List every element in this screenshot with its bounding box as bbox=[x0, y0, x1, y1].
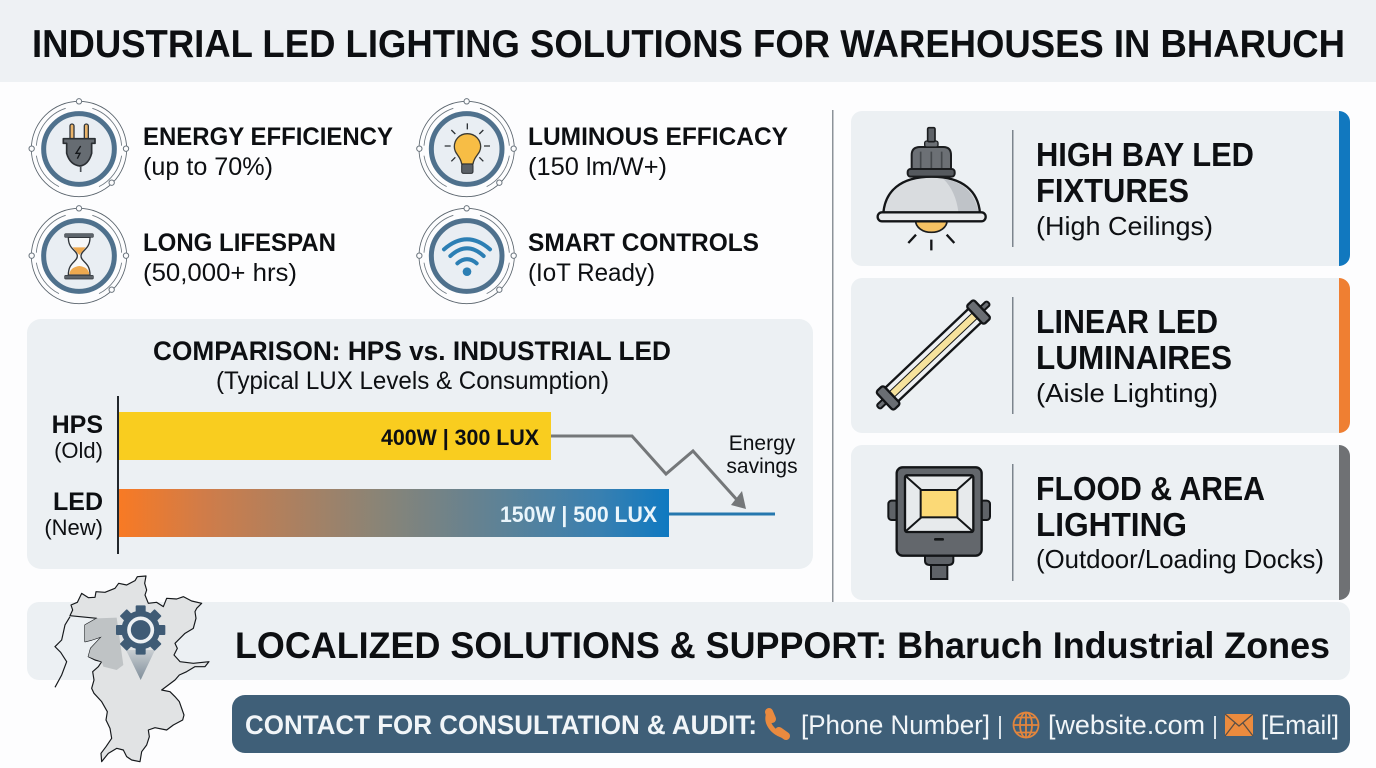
feature: energy efficiency bbox=[29, 99, 393, 197]
icon: envelope bbox=[1225, 714, 1253, 736]
card text: HIGH BAY LED bbox=[1036, 136, 1254, 173]
card text: LUMINAIRES bbox=[1036, 339, 1232, 376]
label: HPS: (Old) bbox=[54, 438, 103, 463]
icon: gear bbox=[116, 605, 165, 655]
card text bbox=[1036, 470, 1324, 574]
card text bbox=[1036, 303, 1232, 408]
localized support banner bbox=[27, 602, 1350, 680]
contact bar: [Phone Number] bbox=[801, 710, 990, 740]
card text: (Outdoor/Loading Docks) bbox=[1036, 544, 1324, 574]
card text: (Aisle Lighting) bbox=[1036, 378, 1218, 408]
feature: energy efficiency: ENERGY EFFICIENCY bbox=[143, 123, 393, 151]
panel: linear bbox=[851, 278, 1350, 433]
divider bbox=[832, 110, 834, 602]
icon: high bay lamp bbox=[878, 128, 986, 250]
contact bar bbox=[232, 695, 1350, 753]
arrow: energy savings bbox=[551, 436, 775, 514]
contact bar: CONTACT FOR CONSULTATION & AUDIT: bbox=[245, 710, 757, 740]
card text: FIXTURES bbox=[1036, 172, 1189, 209]
icon: globe bbox=[1014, 712, 1038, 738]
icon: hourglass bbox=[29, 206, 129, 304]
annotation: energy savings bbox=[726, 432, 798, 478]
card text: (High Ceilings) bbox=[1036, 211, 1213, 241]
feature: luminous efficacy: (150 lm/W+) bbox=[528, 153, 667, 181]
localized support banner: LOCALIZED SOLUTIONS & SUPPORT: Bharuch Industrial Zones bbox=[235, 625, 1330, 666]
annotation: energy savings: Energy bbox=[729, 432, 796, 455]
bar: LED: 150W | 500 LUX bbox=[500, 502, 657, 527]
icon: plug bbox=[29, 99, 129, 197]
card text: LIGHTING bbox=[1036, 506, 1187, 543]
feature: luminous efficacy bbox=[417, 99, 788, 197]
panel: flood bbox=[851, 445, 1350, 600]
icon: flood light bbox=[888, 467, 990, 579]
bar: LED bbox=[119, 489, 669, 537]
panel: high bay bbox=[851, 111, 1350, 266]
feature: energy efficiency: (up to 70%) bbox=[143, 153, 273, 181]
icon: light bulb bbox=[417, 99, 516, 197]
chart subheading: (Typical LUX Levels & Consumption) bbox=[216, 367, 609, 395]
feature: long lifespan: LONG LIFESPAN bbox=[143, 229, 336, 257]
card text bbox=[1036, 136, 1254, 241]
map with gear pin bbox=[55, 576, 209, 762]
card text: LINEAR LED bbox=[1036, 303, 1218, 340]
axis bbox=[117, 396, 119, 554]
label: HPS bbox=[52, 411, 103, 463]
feature: smart controls bbox=[417, 206, 759, 304]
contact bar: | bbox=[997, 712, 1003, 740]
annotation: energy savings: savings bbox=[726, 455, 798, 478]
contact bar: [Email] bbox=[1261, 710, 1339, 740]
icon: wifi bbox=[417, 206, 516, 304]
label: HPS: HPS bbox=[52, 411, 103, 439]
card text: FLOOD & AREA bbox=[1036, 470, 1265, 507]
contact bar: | bbox=[1212, 712, 1218, 740]
feature: long lifespan bbox=[29, 206, 336, 304]
contact bar: [website.com bbox=[1048, 710, 1205, 740]
feature: smart controls: SMART CONTROLS bbox=[528, 229, 759, 257]
bar: HPS: 400W | 300 LUX bbox=[381, 425, 539, 450]
chart heading: COMPARISON: HPS vs. INDUSTRIAL LED bbox=[153, 336, 671, 366]
bar: HPS bbox=[119, 412, 551, 460]
feature: luminous efficacy: LUMINOUS EFFICACY bbox=[528, 123, 788, 151]
icon: linear tube bbox=[869, 293, 997, 416]
feature: long lifespan: (50,000+ hrs) bbox=[143, 259, 297, 287]
label: LED: LED bbox=[53, 488, 103, 516]
header band bbox=[0, 0, 1376, 82]
panel: comparison chart bbox=[27, 319, 813, 569]
label: LED bbox=[44, 488, 103, 540]
icon: phone bbox=[768, 712, 786, 736]
label: LED: (New) bbox=[44, 515, 103, 540]
feature: smart controls: (IoT Ready) bbox=[528, 259, 655, 287]
